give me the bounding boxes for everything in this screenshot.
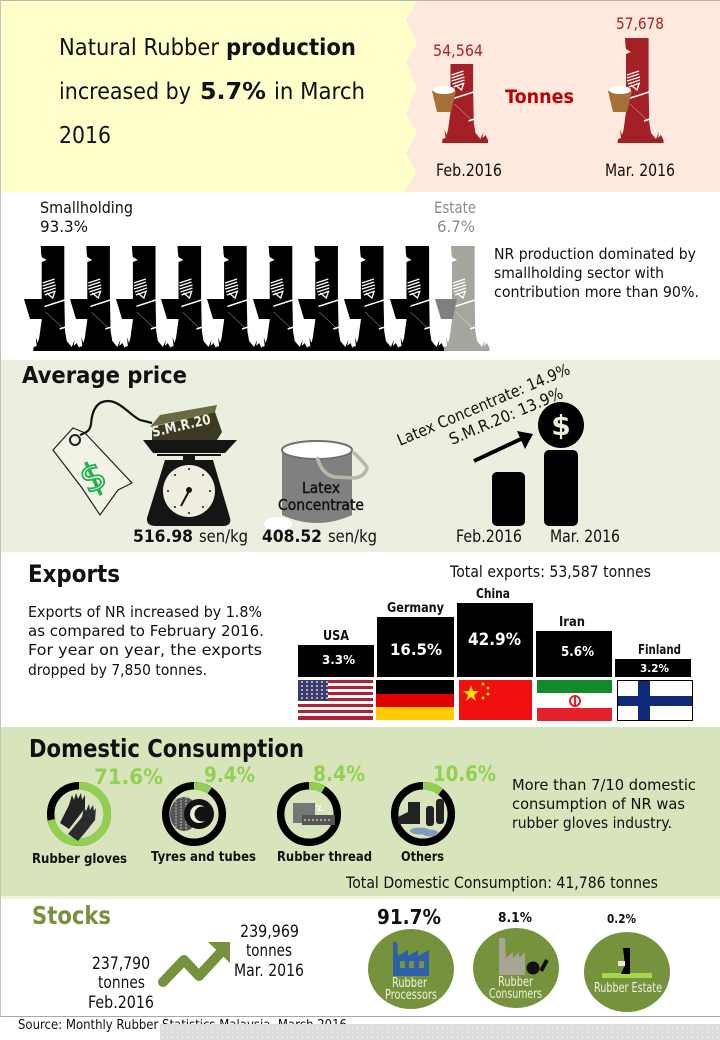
price labels: sen/kg <box>328 527 377 547</box>
chart: export shares <box>298 587 691 677</box>
panel: domestic consumption: Total Domestic Consumption: 41,786 tonnes <box>345 873 658 892</box>
chart: production by month: Tonnes <box>505 87 574 108</box>
stock figures <box>88 922 304 1013</box>
stock figures: tonnes <box>246 941 292 961</box>
chart: export shares: 3.2% <box>640 662 669 675</box>
chart: export shares: Germany <box>387 601 444 616</box>
icon: latex bucket <box>264 441 367 531</box>
circle: rubber estate: 0.2% <box>607 912 636 926</box>
headline text: 2016 <box>59 123 111 149</box>
rotated change labels: Latex Concentrate: 14.9% <box>394 360 573 450</box>
panel: exports <box>0 552 720 727</box>
panel: production by sector: 93.3% <box>40 217 88 236</box>
circle: rubber consumers: Rubber <box>498 975 533 990</box>
chart: price rise bars: Feb.2016 <box>456 527 522 546</box>
icon: Iran flag <box>537 680 612 721</box>
donut: rubber gloves: Rubber gloves <box>32 852 127 867</box>
headline text: in March <box>274 79 365 105</box>
exports note <box>28 603 264 679</box>
chart: price rise bars <box>456 402 620 546</box>
chart: price rise bars: $ <box>551 409 571 442</box>
panel: stocks <box>0 899 720 1017</box>
circle: rubber estate <box>584 912 670 1012</box>
donut: rubber gloves <box>32 765 163 867</box>
sector note: NR production dominated by <box>494 245 696 263</box>
panel: production by sector: 6.7% <box>437 217 475 236</box>
stock figures: Feb.2016 <box>88 993 154 1013</box>
donut: tyres and tubes: Tyres and tubes <box>151 850 256 865</box>
donut: rubber thread <box>277 762 372 865</box>
exports note: dropped by 7,850 tonnes. <box>28 661 207 679</box>
panel: production headline <box>0 0 720 192</box>
chart: export shares: China <box>476 587 510 602</box>
donut: rubber thread: 8.4% <box>313 762 365 786</box>
heading: Stocks <box>32 901 111 930</box>
chart: export shares: 3.3% <box>322 652 355 667</box>
pictogram: rubber trees <box>24 246 490 351</box>
page left edge <box>0 0 1 1017</box>
consumption note: rubber gloves industry. <box>512 814 672 832</box>
donut: others <box>395 762 496 865</box>
circle: rubber processors <box>368 905 454 1009</box>
panel: domestic consumption <box>0 727 720 899</box>
headline text: increased by <box>59 79 191 105</box>
stock figures: tonnes <box>98 973 145 993</box>
panel: exports: Total exports: 53,587 tonnes <box>449 562 651 581</box>
exports note: For year on year, the exports <box>28 641 262 659</box>
chart: production by month: Feb.2016 <box>436 161 502 181</box>
chart: export shares: 16.5% <box>390 640 442 659</box>
arrow: stock rise <box>163 942 230 982</box>
icon: Germany flag <box>376 680 454 720</box>
chart: export shares: USA <box>323 629 349 644</box>
sector note: contribution more than 90%. <box>494 283 699 301</box>
icon: price tag: $ <box>73 452 113 502</box>
sector note: smallholding sector with <box>494 264 664 282</box>
chart: production by month: Mar. 2016 <box>605 161 675 181</box>
icon: latex bucket: Concentrate <box>278 496 364 514</box>
donut: others: 10.6% <box>433 762 496 786</box>
circle: rubber consumers <box>473 911 559 1008</box>
source line: Source: Monthly Rubber Statistics Malaysia, March 2016 <box>18 1017 347 1033</box>
circle: rubber processors: Rubber <box>392 976 427 991</box>
chart: export shares: 5.6% <box>561 645 594 660</box>
donut: tyres and tubes <box>151 763 256 865</box>
consumption note: consumption of NR was <box>512 795 685 813</box>
chart: export shares: 42.9% <box>468 630 521 649</box>
chart: production by month <box>432 14 675 181</box>
donut: rubber gloves: 71.6% <box>94 765 163 789</box>
headline text: Natural Rubber <box>59 35 219 61</box>
headline text: 5.7% <box>200 79 266 105</box>
icon: S.M.R.20 block on scale: S.M.R.20 <box>150 412 213 441</box>
circle: rubber consumers: 8.1% <box>498 911 532 926</box>
icon: latex bucket: Latex <box>302 479 340 497</box>
rotated change labels: S.M.R.20: 13.9% <box>446 384 566 449</box>
consumption note: More than 7/10 domestic <box>512 776 696 794</box>
sector note <box>494 245 699 301</box>
heading: Exports <box>28 560 120 588</box>
headline text: production <box>226 35 356 61</box>
panel: production by sector <box>0 192 720 360</box>
chart: production by month: 57,678 <box>616 14 664 33</box>
stock figures: Mar. 2016 <box>234 961 304 981</box>
icon: Finland flag <box>618 680 692 720</box>
donut: rubber thread: Rubber thread <box>277 850 372 865</box>
price labels: sen/kg <box>199 527 248 547</box>
stock figures: 237,790 <box>92 954 150 974</box>
chart: price rise bars: Mar. 2016 <box>550 527 620 546</box>
circle: rubber consumers: Consumers <box>489 987 542 1002</box>
heading: Domestic Consumption <box>29 734 304 763</box>
heading: Average price <box>22 363 187 389</box>
chart: production by month: 54,564 <box>433 41 483 60</box>
panel: production by sector: Smallholding <box>40 198 133 217</box>
icon: S.M.R.20 block on scale <box>143 405 237 526</box>
circle: rubber processors: 91.7% <box>377 905 441 929</box>
price labels: 516.98 <box>133 527 193 547</box>
price labels: 408.52 <box>262 527 322 547</box>
panel: average price <box>0 360 720 552</box>
stock figures: 239,969 <box>240 922 299 942</box>
source line <box>18 1017 720 1040</box>
icon: latex cups <box>432 86 632 112</box>
exports note: as compared to February 2016. <box>28 622 264 640</box>
consumption note <box>512 776 696 832</box>
donut: others: Others <box>401 850 444 865</box>
chart: export shares: Iran <box>559 615 585 630</box>
headline text <box>59 35 365 149</box>
circle: rubber estate: Rubber Estate <box>594 981 662 996</box>
donut: tyres and tubes: 9.4% <box>204 763 255 787</box>
circle: rubber processors: Processors <box>385 988 437 1003</box>
exports note: Exports of NR increased by 1.8% <box>28 603 262 621</box>
icon: China flag <box>459 680 532 720</box>
chart: export shares: Finland <box>638 643 681 658</box>
price labels <box>133 527 377 547</box>
panel: production by sector: Estate <box>434 198 476 217</box>
icon: price tag <box>53 401 152 515</box>
icon: USA flag <box>298 680 373 720</box>
